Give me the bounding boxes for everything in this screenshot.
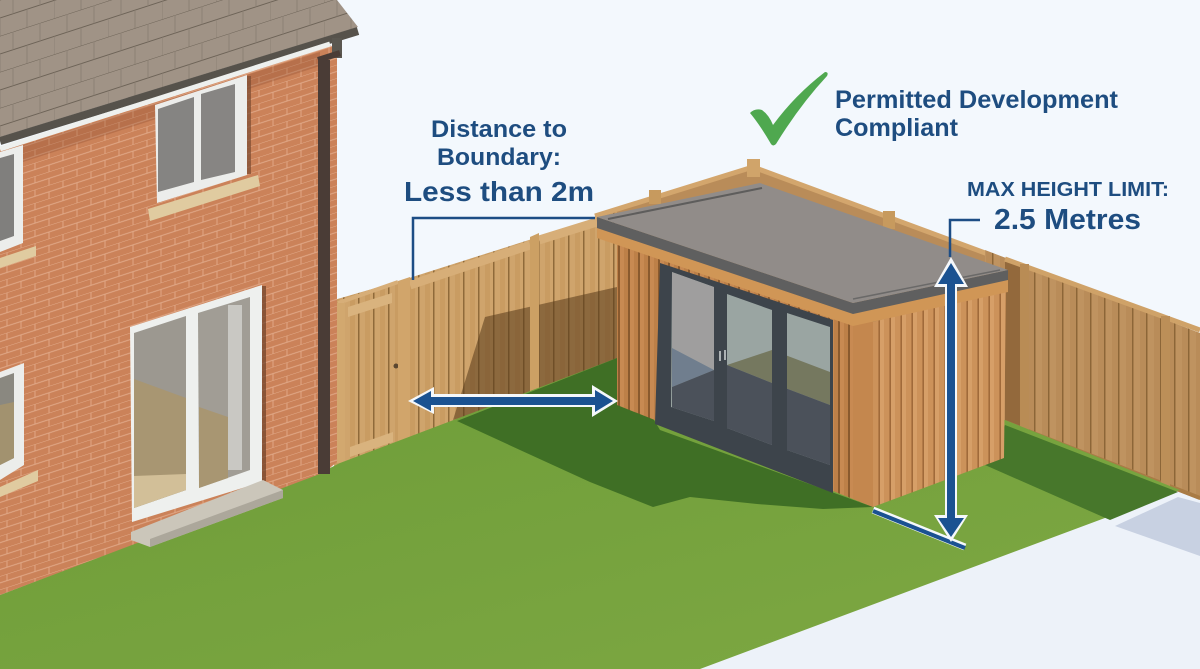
patio door [130, 285, 283, 547]
upper window [148, 75, 260, 221]
roof surface [597, 183, 1008, 303]
window sill [148, 175, 260, 221]
height label [967, 179, 1169, 236]
roof edge [597, 217, 1008, 314]
eave shadow [23, 52, 320, 162]
window sill [0, 246, 36, 268]
height label: MAX HEIGHT LIMIT: [967, 179, 1169, 201]
distance label: Distance to [431, 116, 567, 143]
baseline marker [873, 510, 965, 548]
downpipe [318, 38, 342, 474]
door step [131, 480, 283, 547]
brick wall [0, 45, 337, 595]
compliance label: Permitted Development [835, 86, 1119, 114]
right fence [985, 250, 1200, 500]
back fence behind garden room [595, 159, 1023, 330]
gutter [0, 31, 358, 141]
lawn shadow by right fence [985, 425, 1178, 520]
window sill [0, 470, 38, 497]
garden room [597, 183, 1008, 507]
height arrow [934, 257, 968, 542]
distance label: Less than 2m [404, 176, 594, 207]
height leader line [950, 220, 980, 257]
fence post [530, 233, 539, 392]
patio with shadow [700, 490, 1200, 669]
check mark icon [750, 72, 828, 146]
distance leader line [413, 218, 595, 280]
house [0, 0, 358, 595]
door handles [720, 350, 725, 361]
left fence [334, 212, 617, 470]
lawn [0, 358, 1180, 669]
sliding doors [655, 263, 835, 493]
roof [0, 0, 358, 137]
distance label [404, 116, 594, 207]
upper left window [0, 145, 36, 268]
height label: 2.5 Metres [994, 204, 1141, 236]
fence post [1020, 264, 1029, 431]
distance label: Boundary: [437, 144, 561, 171]
fascia timber [597, 226, 1008, 326]
fascia [0, 44, 330, 149]
gate [337, 293, 398, 463]
fence post [1161, 316, 1170, 486]
compliance label: Compliant [835, 114, 959, 142]
compliance label [835, 86, 1119, 142]
corner board [853, 322, 873, 507]
fence shadow [453, 287, 617, 420]
lawn shadow of garden room [457, 358, 873, 509]
distance arrow [408, 385, 618, 417]
front wall cladding [617, 240, 873, 507]
fence post [398, 277, 410, 443]
side wall cladding [873, 288, 1006, 507]
lower left window [0, 363, 38, 497]
